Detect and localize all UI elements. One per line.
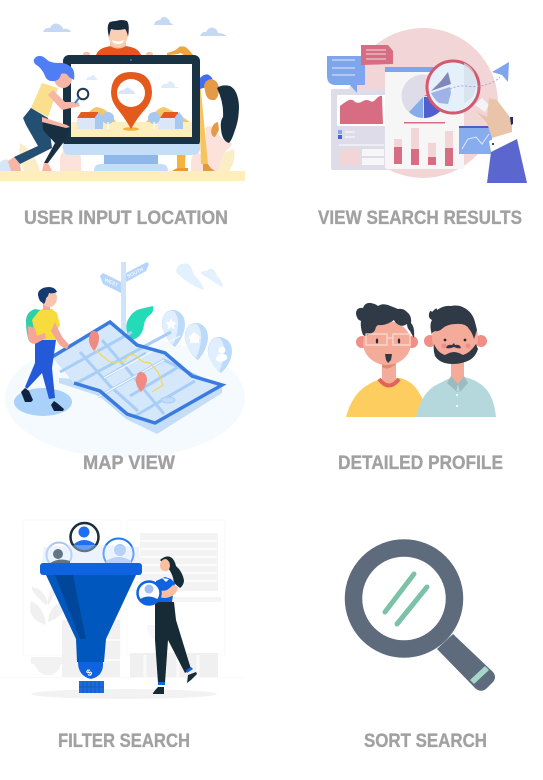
icon: woman with magnifier [8,56,88,171]
icon: woman holding avatar [138,556,197,694]
icon: magnifying glass [427,61,489,113]
icon: user avatars above funnel [46,523,134,568]
icon: signpost [100,262,149,332]
panel: sort search [354,548,495,752]
icon: signpost: SOUTH [126,267,145,280]
handle stripe [470,666,489,684]
icon: pink backdrop circle [348,28,498,178]
route line [94,349,163,392]
icon: location pin [111,72,152,131]
icon: teal leaf [126,306,153,340]
icon: faint room backdrop [0,520,243,678]
heading: user input location: USER INPUT LOCATION [24,207,228,229]
icon: signpost: WEST [103,277,119,289]
icon: person shadow [14,388,72,416]
icon: folded city map [52,322,222,434]
bar chart [394,128,453,166]
panel: filter search [0,520,243,752]
icon: chart card [459,126,492,154]
icon: clouds [43,17,227,36]
icon: pale ground ellipse [5,338,245,458]
icon: bearded man [416,306,496,417]
heading: detailed profile: DETAILED PROFILE [338,452,503,474]
heading: filter search: FILTER SEARCH [58,730,190,752]
list lines [385,574,427,624]
panel: user input location [0,17,245,229]
icon: speech bubbles [327,45,393,93]
icon: funnel: $ [85,667,94,678]
icon: magnifying glass [354,548,495,691]
pin: house [185,323,208,360]
icon: person with glasses [346,303,428,417]
pin: star [162,310,185,347]
icon: walking man with backpack [21,287,69,411]
pie chart [402,74,445,118]
panel: detailed profile [338,303,503,474]
icon: hand and sleeve [477,98,527,183]
icon: person behind monitor [83,20,153,57]
panel: view search results [318,28,527,229]
heading: sort search: SORT SEARCH [364,730,487,752]
heading: map view: MAP VIEW [83,452,176,474]
pin: person [208,337,232,373]
icon: person with dark hair behind right of monitor [167,46,239,171]
icon: monitor [63,55,200,171]
icon: ground strip [0,171,245,181]
icon: place marker pins [162,310,232,373]
map pins [89,331,99,351]
icon: paper plane and flight path [440,62,509,96]
icon: left report card [331,89,390,170]
icon: clouds [176,263,223,290]
icon: central dashboard page [385,67,464,169]
icon: funnel [40,545,142,693]
icon: ground shadow [31,689,217,699]
icon: leaves and plants [0,126,234,171]
icon: town scene on screen [77,75,190,129]
panel: map view [5,262,245,474]
